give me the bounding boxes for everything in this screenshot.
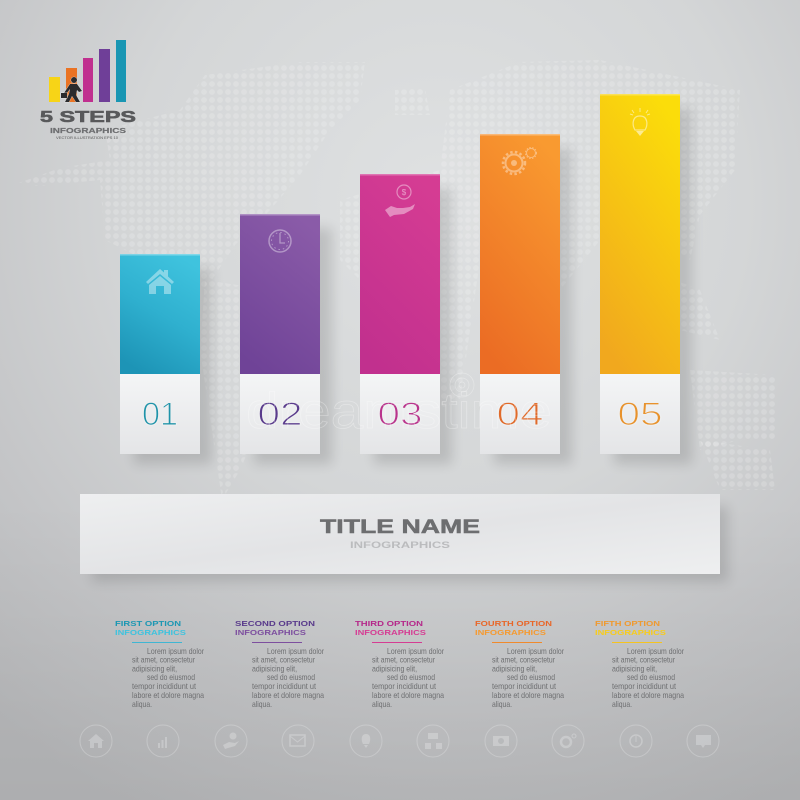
option 3 body: adipisicing elit, — [372, 664, 417, 674]
option 4 body: tempor incididunt ut — [492, 682, 557, 691]
option 2 text block — [235, 619, 324, 709]
option 5 body — [612, 647, 684, 709]
option 3 body: aliqua. — [372, 700, 392, 709]
option 2 body: adipisicing elit, — [252, 664, 297, 674]
bar 4 — [480, 134, 560, 374]
option 4 text block — [475, 619, 564, 709]
option 4 heading: FOURTH OPTION — [475, 619, 552, 628]
option 2 body: sed do eiusmod — [267, 673, 315, 682]
icon: light bulb — [630, 108, 650, 136]
icon: running businessman — [61, 77, 82, 102]
option 5 body: Lorem ipsum dolor — [627, 647, 684, 656]
logo subheading: INFOGRAPHICS — [50, 126, 126, 135]
option 2 body: tempor incididunt ut — [252, 682, 317, 691]
option 1 body — [132, 647, 204, 709]
option 2 body: aliqua. — [252, 700, 272, 709]
step 3 column — [360, 174, 452, 464]
option 2 subheading: INFOGRAPHICS — [235, 628, 306, 637]
option 3 body — [372, 647, 444, 709]
step 5 column — [600, 94, 692, 464]
logo bars — [49, 40, 126, 102]
option 3 heading: THIRD OPTION — [355, 619, 423, 628]
icon: house — [146, 269, 174, 294]
option 2 body — [252, 647, 324, 709]
option 1 body: adipisicing elit, — [132, 664, 177, 674]
option 4 body — [492, 647, 564, 709]
number 03: 03 — [378, 396, 422, 432]
option 4 body: sed do eiusmod — [507, 673, 555, 682]
icon: gears — [503, 148, 536, 174]
option 1 body: Lorem ipsum dolor — [147, 647, 204, 656]
icon: hand with coin — [385, 185, 415, 217]
number 01: 01 — [142, 396, 178, 432]
option 1 body: sit amet, consectetur — [132, 656, 195, 664]
logo heading: 5 STEPS — [40, 109, 136, 126]
step 4 column — [480, 134, 572, 464]
option 3 body: Lorem ipsum dolor — [387, 647, 444, 656]
title panel — [80, 494, 728, 582]
option 4 body: adipisicing elit, — [492, 664, 537, 674]
option 2 body: labore et dolore magna — [252, 691, 324, 700]
bar 1 — [120, 254, 200, 374]
step 2 column — [240, 214, 332, 464]
option 1 body: labore et dolore magna — [132, 691, 204, 700]
option 4 body: labore et dolore magna — [492, 691, 564, 700]
option 1 subheading: INFOGRAPHICS — [115, 628, 186, 637]
option 5 body: tempor incididunt ut — [612, 682, 677, 691]
option 3 body: sed do eiusmod — [387, 673, 435, 682]
option 1 body: aliqua. — [132, 700, 152, 709]
option 5 text block — [595, 619, 684, 709]
number card 1 — [120, 374, 200, 454]
option 5 heading: FIFTH OPTION — [595, 619, 660, 628]
option 4 body: aliqua. — [492, 700, 512, 709]
watermark: dreamstime — [246, 383, 552, 439]
logo caption: VECTOR ILLUSTRATION EPS 10 — [56, 136, 118, 140]
world map dots — [16, 60, 775, 500]
option 4 body: Lorem ipsum dolor — [507, 647, 564, 656]
option 2 body: Lorem ipsum dolor — [267, 647, 324, 656]
logo: 5 steps infographics — [40, 40, 136, 140]
number 05: 05 — [618, 396, 662, 432]
option 5 body: sit amet, consectetur — [612, 656, 675, 664]
option 3 body: labore et dolore magna — [372, 691, 444, 700]
bar 2 — [240, 214, 320, 374]
option 1 heading: FIRST OPTION — [115, 619, 181, 628]
number card 2 — [240, 374, 320, 454]
option 2 heading: SECOND OPTION — [235, 619, 315, 628]
option 5 body: aliqua. — [612, 700, 632, 709]
number 04: 04 — [496, 396, 544, 432]
option 5 body: labore et dolore magna — [612, 691, 684, 700]
icon: hand with coin: $ — [402, 188, 407, 197]
footer icon row — [80, 725, 719, 757]
option 4 body: sit amet, consectetur — [492, 656, 555, 664]
option 5 body: adipisicing elit, — [612, 664, 657, 674]
option 2 body: sit amet, consectetur — [252, 656, 315, 664]
number card 4 — [480, 374, 560, 454]
bar 3 — [360, 174, 440, 374]
option 3 body: tempor incididunt ut — [372, 682, 437, 691]
option 4 subheading: INFOGRAPHICS — [475, 628, 546, 637]
option 3 text block — [355, 619, 444, 709]
option 3 subheading: INFOGRAPHICS — [355, 628, 426, 637]
option 1 body: tempor incididunt ut — [132, 682, 197, 691]
option 1 body: sed do eiusmod — [147, 673, 195, 682]
option 5 body: sed do eiusmod — [627, 673, 675, 682]
icon: clock — [269, 230, 291, 252]
option 5 subheading: INFOGRAPHICS — [595, 628, 666, 637]
option 1 text block — [115, 619, 204, 709]
step 1 column — [120, 254, 212, 464]
number 02: 02 — [258, 396, 302, 432]
number card 3 — [360, 374, 440, 454]
option 3 body: sit amet, consectetur — [372, 656, 435, 664]
subtitle: INFOGRAPHICS — [350, 540, 450, 551]
number card 5 — [600, 374, 680, 454]
title: TITLE NAME — [320, 517, 480, 538]
bar 5 — [600, 94, 680, 374]
